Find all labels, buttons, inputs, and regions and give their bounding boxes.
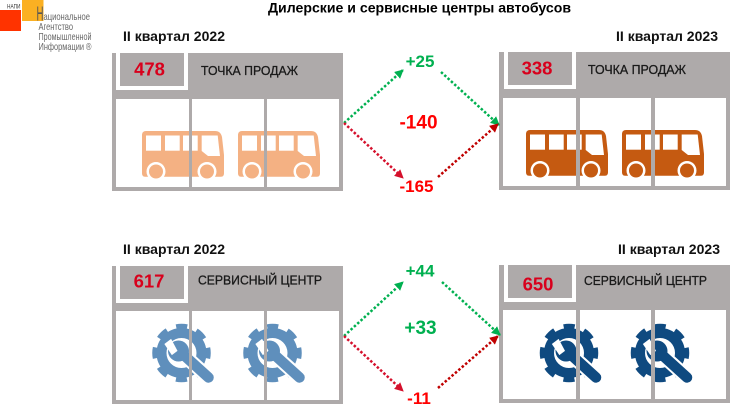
- logo: Н: [36, 4, 44, 26]
- delta: +33: +33: [404, 318, 437, 339]
- delta: -165: -165: [399, 177, 434, 196]
- delta: +44: +44: [406, 262, 435, 280]
- logo: Агентство: [38, 21, 73, 33]
- heading: II quarter 2022, service: II квартал 2022: [123, 241, 225, 257]
- value: 338: 338: [522, 58, 552, 78]
- delta: -140: -140: [399, 112, 438, 134]
- logo: НАПИ: [7, 4, 20, 10]
- icon: dark gear 1: [542, 326, 599, 380]
- icon: dark bus 1: [526, 130, 608, 180]
- value: 650: 650: [523, 274, 553, 294]
- delta: +25: +25: [406, 52, 434, 71]
- heading: II quarter 2023, service: II квартал 2023: [618, 241, 720, 257]
- heading: II quarter 2022, sales: II квартал 2022: [123, 28, 225, 44]
- logo: [0, 0, 92, 53]
- label: sales point: ТОЧКА ПРОДАЖ: [588, 63, 686, 77]
- heading: II quarter 2023, sales: II квартал 2023: [616, 28, 718, 44]
- icon: light gear 2: [246, 326, 302, 380]
- icon: light bus 2: [238, 131, 320, 181]
- icon: light gear 1: [155, 326, 212, 380]
- logo: Промышленной: [38, 31, 92, 43]
- title: Дилерские и сервисные центры автобусов: [268, 0, 571, 16]
- logo: ациональное: [44, 11, 90, 23]
- icon: light bus 1: [142, 131, 224, 181]
- value: 617: 617: [134, 270, 164, 292]
- icon: dark bus 2: [622, 130, 704, 180]
- panel: sales points 2023: [499, 52, 730, 190]
- icon: dark gear 2: [634, 326, 690, 380]
- panel: service centers 2022: [112, 266, 343, 404]
- label: service center: СЕРВИСНЫЙ ЦЕНТР: [584, 273, 707, 288]
- label: service center: СЕРВИСНЫЙ ЦЕНТР: [198, 272, 322, 288]
- label: sales point: ТОЧКА ПРОДАЖ: [201, 64, 298, 78]
- logo: Информации ®: [38, 41, 92, 53]
- panel: service centers 2023: [499, 265, 730, 403]
- arrows: service centers: [344, 282, 500, 391]
- arrows: sales points: [344, 70, 499, 178]
- panel: sales points 2022: [112, 53, 343, 191]
- value: 478: 478: [134, 58, 165, 80]
